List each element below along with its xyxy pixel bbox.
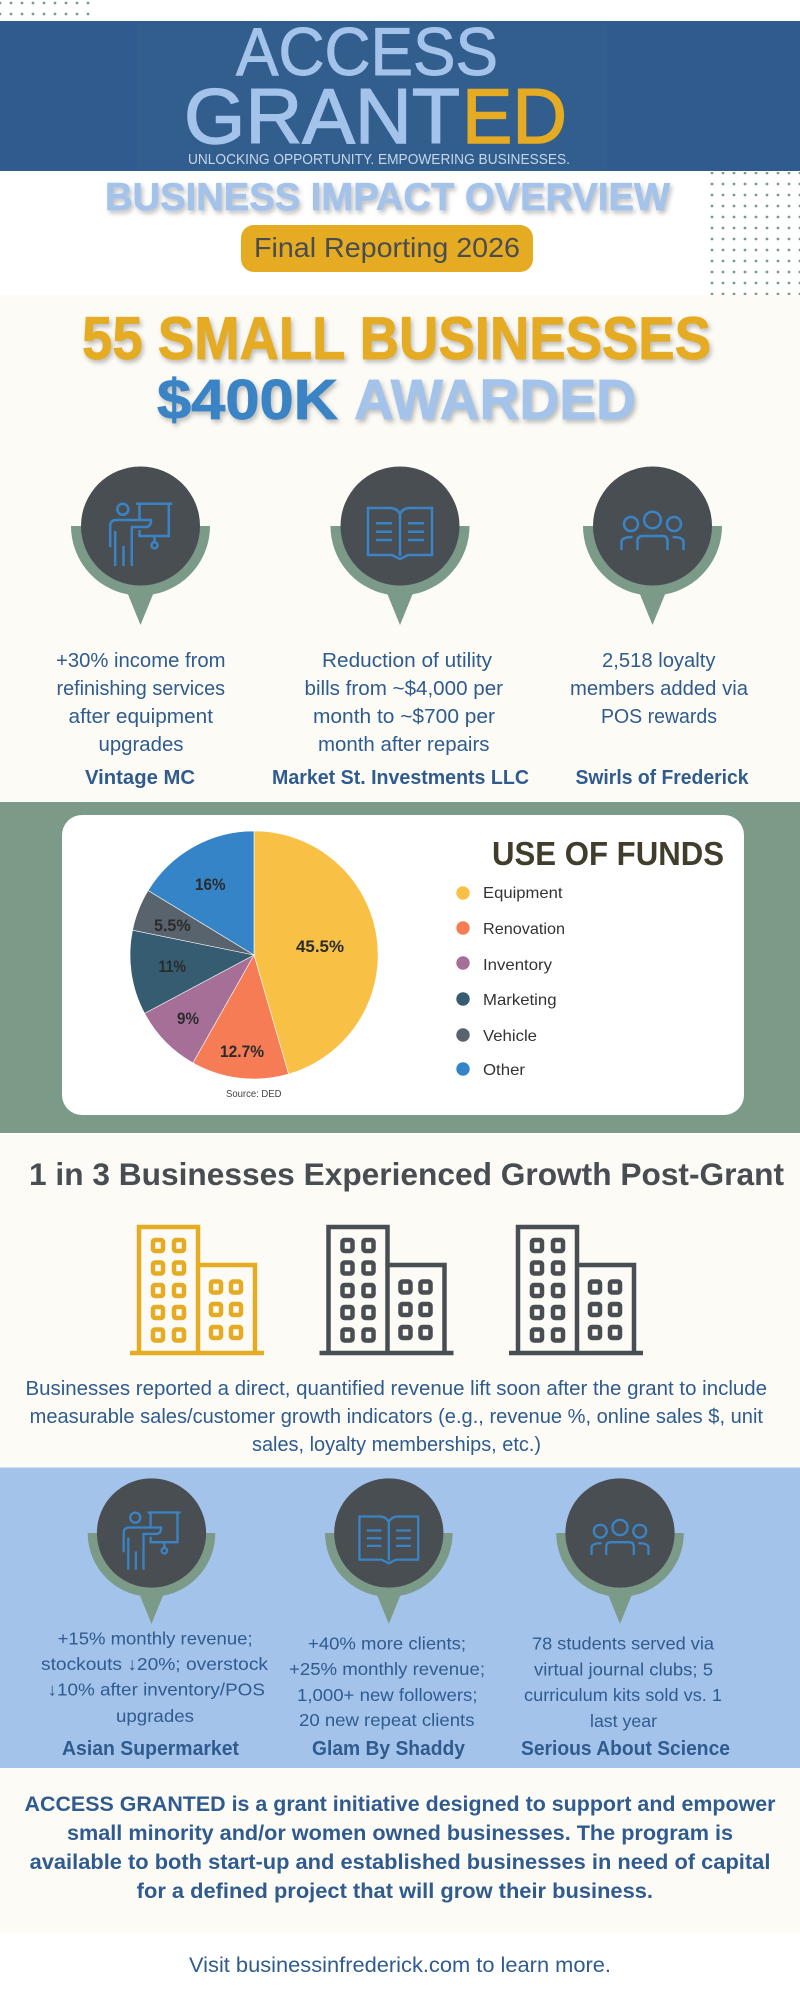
text block: Market St. Investments LLC: month after repairs <box>318 734 490 756</box>
text block: Swirls of Frederick: 2,518 loyalty <box>602 650 716 672</box>
text block: Asian Supermarket: +15% monthly revenue; <box>58 1628 253 1648</box>
text block: Serious About Science <box>521 1634 730 1760</box>
pie chart <box>130 831 378 1079</box>
text block: Swirls of Frederick: Swirls of Frederick <box>576 766 749 789</box>
pie chart: 45.5% <box>296 937 344 956</box>
text block: growth description <box>26 1378 767 1456</box>
icon: presenter pin <box>88 1478 215 1624</box>
icon: building highlighted <box>130 1227 264 1353</box>
pie chart: 16% <box>195 875 226 894</box>
icon: building grey <box>320 1227 454 1353</box>
text block: Market St. Investments LLC <box>272 650 529 789</box>
panel: program description <box>0 1768 800 1933</box>
text block: Asian Supermarket: Asian Supermarket <box>62 1737 239 1760</box>
icon: presenter pin <box>71 466 210 625</box>
text block: Market St. Investments LLC: Reduction of utility <box>322 650 492 672</box>
text block: Serious About Science: 78 students served via <box>532 1634 714 1654</box>
pie chart: 5.5% <box>154 916 191 935</box>
banner: Access Granted logo: GRANT <box>184 72 460 160</box>
headline: 55 small businesses: 55 SMALL BUSINESSES <box>82 305 711 372</box>
panel: program description: small minority and/or women owned businesses. The program is <box>67 1821 733 1845</box>
text block: growth description: Businesses reported a direct, quantified revenue lift soon after the grant to include <box>26 1378 767 1400</box>
panel: program description: ACCESS GRANTED is a grant initiative designed to support and empower <box>24 1792 776 1816</box>
heading: 1 in 3 businesses: 1 in 3 Businesses Experienced Growth Post-Grant <box>29 1156 784 1192</box>
panel: headline and first stories <box>0 295 800 802</box>
text block: Market St. Investments LLC: Market St. Investments LLC <box>272 766 529 789</box>
legend: Equipment <box>483 885 563 902</box>
text block: Swirls of Frederick: members added via <box>570 678 749 700</box>
text block: Vintage MC: refinishing services <box>56 678 225 700</box>
legend: Inventory <box>483 957 552 974</box>
text block: Vintage MC: Vintage MC <box>85 766 195 789</box>
heading: use of funds: USE OF FUNDS <box>492 835 724 872</box>
legend: Vehicle <box>483 1028 537 1045</box>
headline: $400K awarded: AWARDED <box>354 368 636 432</box>
text block: Asian Supermarket: upgrades <box>116 1706 194 1726</box>
panel: program description: for a defined project that will grow their business. <box>137 1879 653 1903</box>
text block: Serious About Science: last year <box>590 1711 657 1731</box>
banner: Access Granted logo <box>0 14 800 171</box>
legend <box>456 885 565 1079</box>
text block: Asian Supermarket: stockouts ↓20%; overstock <box>41 1654 268 1674</box>
text block: Glam By Shaddy <box>289 1634 485 1760</box>
text block: growth description: measurable sales/customer growth indicators (e.g., revenue %, online sales $, unit <box>30 1406 763 1428</box>
pie chart: 11% <box>158 957 186 976</box>
panel: use of funds <box>0 802 800 1133</box>
banner: Access Granted logo: UNLOCKING OPPORTUNITY. EMPOWERING BUSINESSES. <box>188 151 570 168</box>
legend: Other <box>483 1062 526 1079</box>
panel: program description: available to both start-up and established businesses in need of capital <box>30 1850 770 1874</box>
legend: Marketing <box>483 992 556 1009</box>
panel: growth <box>0 1133 800 1468</box>
text block: Glam By Shaddy: Glam By Shaddy <box>312 1737 466 1760</box>
text block: Vintage MC: after equipment <box>68 706 213 728</box>
text block: Glam By Shaddy: +40% more clients; <box>308 1634 466 1654</box>
footer link text: Visit businessinfrederick.com to learn more. <box>189 1954 611 1977</box>
headline: $400K awarded: $400K <box>157 368 338 432</box>
badge: Final Reporting 2026 <box>241 225 533 272</box>
badge: Final Reporting 2026: Final Reporting 2026 <box>254 232 520 263</box>
text block: Vintage MC: +30% income from <box>56 650 226 672</box>
pie chart: 9% <box>177 1009 199 1028</box>
text block: Swirls of Frederick <box>570 650 749 789</box>
text block: Serious About Science: Serious About Science <box>521 1737 730 1760</box>
pie chart: 12.7% <box>220 1042 264 1061</box>
text block: Swirls of Frederick: POS rewards <box>601 706 717 728</box>
text block: Asian Supermarket <box>41 1628 268 1760</box>
text block: Asian Supermarket: ↓10% after inventory/POS <box>48 1680 265 1700</box>
headline: $400K awarded <box>157 368 636 432</box>
text block: Vintage MC <box>56 650 226 789</box>
source note: Source: DED <box>226 1088 282 1100</box>
legend: Renovation <box>483 921 565 938</box>
text block: growth description: sales, loyalty memberships, etc.) <box>252 1434 541 1456</box>
banner: Access Granted logo: ED <box>462 72 567 160</box>
text block: Serious About Science: virtual journal clubs; 5 <box>534 1660 713 1680</box>
heading: Business Impact Overview: BUSINESS IMPACT OVERVIEW <box>105 176 670 219</box>
text block: Serious About Science: curriculum kits sold vs. 1 <box>524 1685 722 1705</box>
icon: building grey second <box>509 1227 643 1353</box>
icon: people pin <box>556 1478 684 1624</box>
text block: Market St. Investments LLC: month to ~$700 per <box>313 706 495 728</box>
text block: Glam By Shaddy: 1,000+ new followers; <box>297 1685 478 1705</box>
text block: Vintage MC: upgrades <box>98 734 184 756</box>
icon: book pin <box>330 466 470 625</box>
text block: Market St. Investments LLC: bills from ~$4,000 per <box>304 678 503 700</box>
banner: Access Granted logo: ACCESS <box>236 14 498 90</box>
text block: Glam By Shaddy: 20 new repeat clients <box>299 1710 475 1730</box>
icon: book pin <box>325 1478 453 1624</box>
icon: people pin <box>583 466 722 625</box>
text block: Glam By Shaddy: +25% monthly revenue; <box>289 1659 485 1679</box>
panel: second stories <box>0 1468 800 1768</box>
